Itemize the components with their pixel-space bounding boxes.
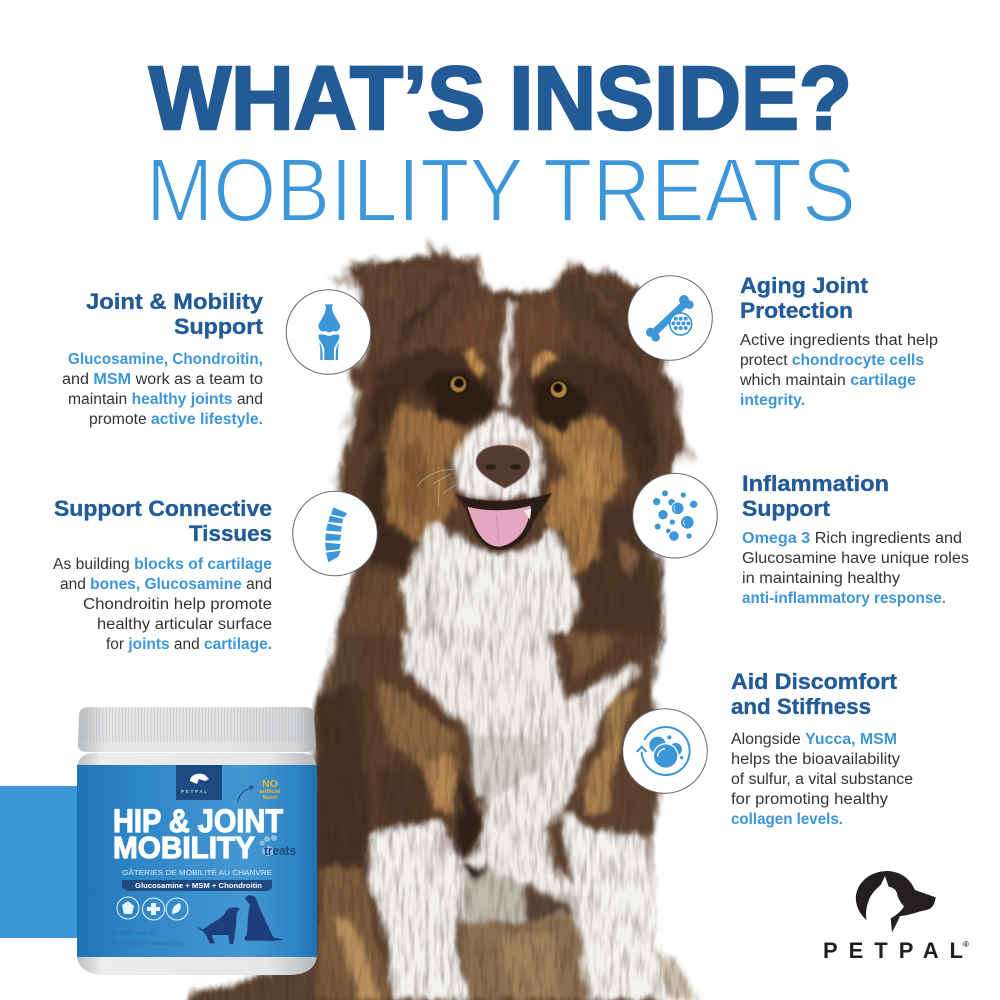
heading: Support bbox=[742, 496, 831, 521]
body text: in maintaining healthy bbox=[742, 570, 900, 587]
no artificial flavor badge bbox=[259, 778, 281, 801]
treats script: treats bbox=[264, 843, 296, 858]
jar title: MOBILITY bbox=[113, 830, 255, 865]
heading bbox=[742, 471, 889, 521]
brand tab: PETPAL bbox=[181, 789, 209, 794]
jar title bbox=[113, 803, 283, 865]
heading: Aid Discomfort bbox=[731, 669, 898, 694]
body text: Omega 3 Rich ingredients and bbox=[742, 530, 962, 547]
body text: integrity. bbox=[740, 392, 805, 409]
body text: healthy articular surface bbox=[97, 616, 272, 633]
nose bbox=[476, 445, 530, 488]
panel: inflammation support bbox=[742, 471, 969, 607]
body text bbox=[53, 556, 272, 653]
heading bbox=[740, 273, 869, 323]
jar title: HIP & JOINT bbox=[113, 803, 283, 839]
jar label bbox=[77, 765, 317, 957]
body text: for joints and cartilage. bbox=[106, 636, 272, 653]
body text: Glucosamine, Chondroitin, bbox=[68, 351, 263, 368]
body text: for promoting healthy bbox=[731, 791, 888, 808]
subtitle: Mobility Treats: MOBILITY TREATS bbox=[146, 141, 856, 241]
heading: Aging Joint bbox=[740, 273, 869, 298]
body text: As building blocks of cartilage bbox=[53, 556, 272, 573]
heading: Joint & Mobility bbox=[86, 289, 264, 314]
blue accent block behind the jar bbox=[0, 786, 90, 938]
body text: Alongside Yucca, MSM bbox=[731, 731, 897, 748]
brand tab bbox=[176, 765, 222, 800]
panel: aid discomfort and stiffness bbox=[731, 669, 913, 828]
heading: Support bbox=[174, 314, 264, 339]
panel: aging joint protection bbox=[739, 273, 938, 409]
icon: inflammation bubbles bbox=[633, 473, 717, 558]
no artificial flavor badge: flavor! bbox=[262, 795, 278, 801]
dog body bbox=[187, 557, 700, 1000]
body text bbox=[742, 530, 969, 607]
body text bbox=[731, 731, 913, 828]
logo wordmark: PETPAL bbox=[823, 938, 963, 963]
heading bbox=[54, 496, 272, 546]
body text: and bones, Glucosamine and bbox=[60, 576, 272, 593]
heading: and Stiffness bbox=[731, 694, 871, 719]
no artificial flavor badge: NO bbox=[262, 778, 278, 790]
ingredients band: Glucosamine + MSM + Chondroitin bbox=[135, 881, 262, 890]
dog face details bbox=[417, 375, 570, 550]
icon: spine bbox=[293, 491, 377, 576]
heading bbox=[86, 289, 264, 339]
jar lid bbox=[78, 707, 316, 752]
heading: Support Connective bbox=[54, 496, 272, 521]
logo mark: dog and cat silhouette bbox=[856, 871, 936, 932]
panel: support connective tissues bbox=[53, 496, 272, 653]
dog head and ruff bbox=[333, 242, 693, 633]
dog silhouettes on jar bbox=[195, 895, 283, 944]
registered mark: ® bbox=[963, 940, 969, 949]
panel: joint and mobility support bbox=[62, 289, 264, 428]
body text: Chondroitin help promote bbox=[83, 596, 272, 613]
tongue bbox=[467, 506, 531, 547]
body text bbox=[62, 351, 263, 428]
fur wisps bbox=[333, 242, 693, 560]
body text: anti-inflammatory response. bbox=[742, 590, 946, 607]
body text: collagen levels. bbox=[731, 811, 843, 828]
paw print bbox=[260, 835, 277, 856]
net contents bbox=[112, 931, 182, 947]
icon: bone with cartilage cells bbox=[628, 276, 712, 360]
no artificial flavor badge: artificial bbox=[259, 789, 281, 795]
badges bbox=[117, 897, 188, 920]
right eye bbox=[548, 380, 570, 398]
heading bbox=[731, 669, 898, 719]
body text: and MSM work as a team to bbox=[62, 371, 263, 388]
net contents: NET CONTENTS 368g (12.7oz) bbox=[112, 941, 182, 947]
heading: Tissues bbox=[189, 521, 272, 546]
tooth bbox=[524, 508, 531, 519]
body text: Active ingredients that help bbox=[740, 332, 938, 349]
product: Hip & Joint Mobility treats jar bbox=[77, 707, 317, 975]
body text: of sulfur, a vital substance bbox=[731, 771, 913, 788]
title: What's Inside?: WHAT’S INSIDE? bbox=[149, 49, 852, 149]
whiskers bbox=[417, 470, 455, 507]
body text: which maintain cartilage bbox=[739, 372, 916, 389]
net contents: 90 SOFT CHEWS bbox=[112, 931, 156, 937]
ingredients band bbox=[122, 880, 272, 891]
jar body bbox=[77, 753, 317, 975]
french subtitle: GÂTERIES DE MOBILITÉ AU CHANVRE bbox=[122, 868, 272, 877]
heading: Protection bbox=[740, 298, 853, 323]
body text: Glucosamine have unique roles bbox=[742, 550, 969, 567]
heading: Inflammation bbox=[742, 471, 889, 496]
body text bbox=[739, 332, 938, 409]
mouth bbox=[456, 493, 552, 550]
left eye bbox=[447, 375, 469, 393]
body text: helps the bioavailability bbox=[731, 751, 900, 768]
icon: renewal cycle bubbles bbox=[623, 709, 707, 793]
body text: promote active lifestyle. bbox=[89, 411, 263, 428]
body text: protect chondrocyte cells bbox=[740, 352, 924, 369]
body text: maintain healthy joints and bbox=[68, 391, 263, 408]
logo: PetPal bbox=[823, 871, 969, 963]
photo: sitting Australian shepherd dog bbox=[187, 242, 700, 1000]
icon: knee joint bbox=[286, 290, 371, 374]
